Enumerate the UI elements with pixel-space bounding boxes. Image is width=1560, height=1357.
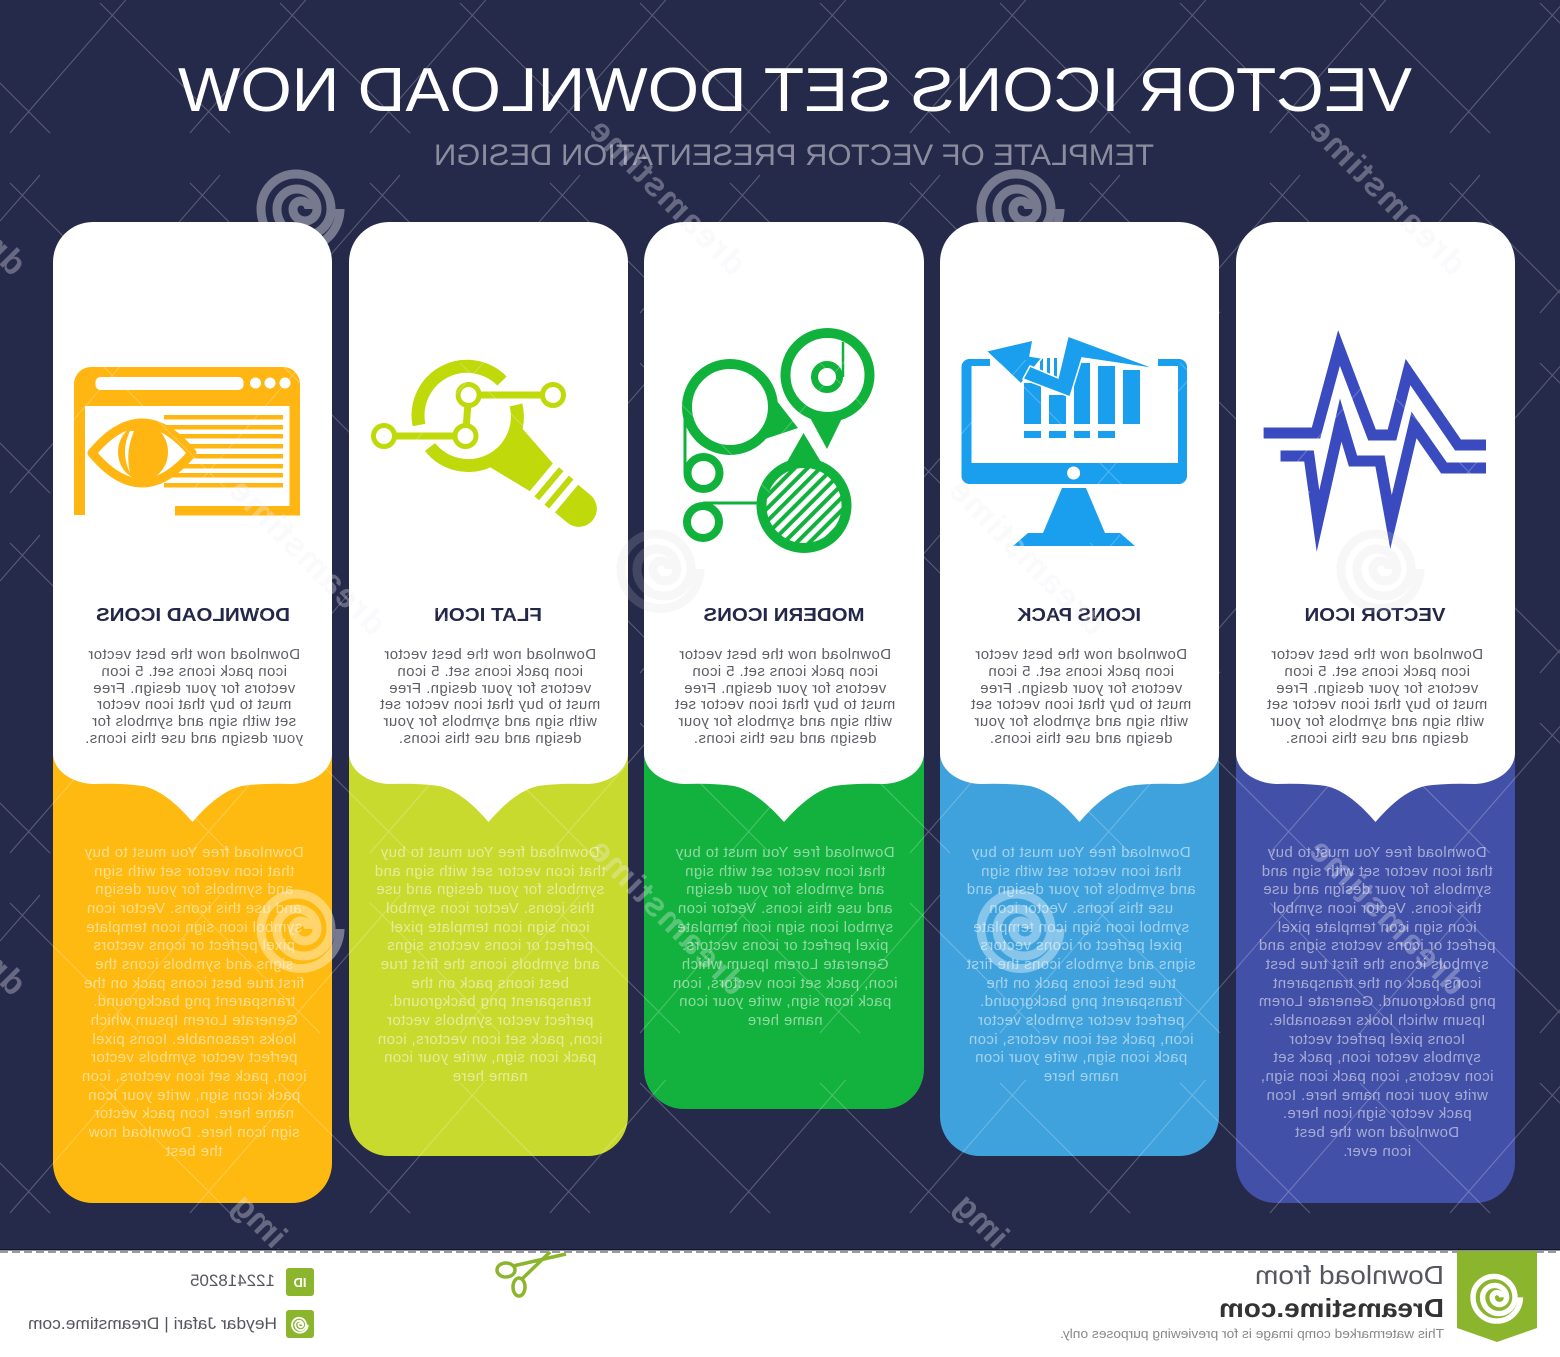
- text: upper description: Download now the best vector: [88, 646, 300, 663]
- text: lower description: icon ever.: [1343, 1143, 1411, 1160]
- text: lower description: Generate Lorem Ipsum which: [90, 1012, 298, 1029]
- text: lower description: icon sign icon template pixel: [390, 919, 590, 936]
- heading: modern icons: MODERN ICONS: [704, 604, 864, 625]
- text: upper description: [674, 646, 895, 747]
- panel: flat icon: [349, 222, 628, 1156]
- text: lower description: signs and symbols icons the first: [966, 956, 1196, 973]
- text: lower description: write your icon name here. Icon: [1266, 1087, 1489, 1104]
- text: lower description: icon, pack set icon vectors, icon: [82, 1068, 306, 1085]
- text: lower description: and symbols for your design and: [966, 881, 1196, 898]
- text: upper description: design and use this icons.: [989, 730, 1173, 747]
- text: upper description: vectors for your design. Free: [389, 680, 591, 697]
- watermark spirals: [261, 174, 1420, 1330]
- text: lower description: [1258, 844, 1496, 1160]
- text: lower description: Download free You must to buy: [971, 844, 1191, 861]
- panel: icons pack: [940, 222, 1219, 1156]
- text: lower description: icon vectors, icon pack icon sign,: [1261, 1068, 1493, 1085]
- text: lower description: Generate Lorem Ipsum which: [681, 956, 889, 973]
- text: lower description: this icons. Vector icon symbol: [1273, 900, 1481, 917]
- heading: vector icon: VECTOR ICON: [1304, 604, 1446, 625]
- text: lower description: icon, pack set icon vectors, icon: [378, 1031, 602, 1048]
- text: upper description: design and use this icons.: [1285, 730, 1469, 747]
- text: lower description: [673, 844, 897, 1029]
- text: lower description: and use this icons. Vector icon: [677, 900, 893, 917]
- text: upper description: must to buy that icon vector set: [1266, 696, 1487, 713]
- text: lower description: name here. Icon pack vector: [94, 1105, 294, 1122]
- text: upper description: [970, 646, 1191, 747]
- text: lower description: symbol icon sign icon template: [973, 919, 1189, 936]
- text: upper description: your design and use this icons.: [85, 730, 303, 747]
- watermark text: .img: [947, 1186, 1023, 1262]
- text: lower description: icons pack on the transparent: [1272, 975, 1481, 992]
- text: upper description: [1266, 646, 1487, 747]
- text: lower description: Download free You must to buy: [84, 844, 304, 861]
- text: dreamstime.com: Dreamstime.com: [1219, 1293, 1444, 1323]
- text: watermark note: This watermarked comp image is for previewing purposes only.: [1060, 1326, 1444, 1341]
- heading: download icons: DOWNLOAD ICONS: [96, 604, 290, 625]
- watermark text: dreamstime: [942, 471, 1114, 643]
- text: lower description: [966, 844, 1196, 1085]
- text: lower description: that icon vector set with sign and: [1261, 863, 1493, 880]
- text: lower description: pack icon sign, write your icon: [384, 1049, 596, 1066]
- text: upper description: must to buy that icon vector: [97, 696, 291, 713]
- text: upper description: with sign and symbols for your: [383, 713, 598, 730]
- text: upper description: [379, 646, 600, 747]
- footer: [0, 1249, 1560, 1357]
- watermark text: dreamstime: [1302, 831, 1474, 1003]
- text: upper description: icon pack icons set. 5 icon: [397, 663, 583, 680]
- text: lower description: pack icon sign, write your icon: [975, 1049, 1187, 1066]
- text: lower description: perfect vector symbols vector: [978, 1012, 1184, 1029]
- text: upper description: Download now the best vector: [679, 646, 891, 663]
- text: lower description: perfect vector symbols vector: [387, 1012, 593, 1029]
- text: lower description: and symbols for your design: [95, 881, 293, 898]
- text: lower description: icon, pack set icon vectors, icon: [673, 975, 897, 992]
- icon: browser with eye: [74, 367, 300, 516]
- watermark text: dreamstime: [582, 111, 754, 283]
- text: upper description: design and use this icons.: [693, 730, 877, 747]
- watermark spirals on white: [621, 534, 1420, 608]
- text: lower description: transparent png background.: [389, 993, 591, 1010]
- text: lower description: name here: [452, 1068, 528, 1085]
- text: lower description: pixel perfect or icons vectors.: [682, 937, 888, 954]
- text: lower description: pack icon sign, write your icon: [88, 1087, 300, 1104]
- text: upper description: vectors for your design. Free: [980, 680, 1182, 697]
- panel: modern icons: [644, 222, 924, 1109]
- text: lower description: pack icon sign, write your icon: [679, 993, 891, 1010]
- text: lower description: symbols vector icon, pack set: [1273, 1049, 1481, 1066]
- text: lower description: perfect or icons vectors signs: [387, 937, 593, 954]
- text: lower description: png background. Generate Lorem: [1258, 993, 1496, 1010]
- text: download from: Download from: [1255, 1260, 1444, 1290]
- text: lower description: Download free You must to buy: [380, 844, 600, 861]
- text: lower description: Download free You must to buy: [675, 844, 895, 861]
- text: lower description: best icons pack on the: [411, 975, 569, 992]
- text: upper description: must to buy that icon vector set: [379, 696, 600, 713]
- text: lower description: perfect or icons vectors signs and: [1258, 937, 1496, 954]
- icon: monitor with bar chart: [961, 336, 1187, 546]
- text: lower description: the best: [165, 1143, 222, 1160]
- text: lower description: symbols icons the first true best: [1265, 956, 1489, 973]
- text: lower description: true best icons pack on the: [986, 975, 1176, 992]
- text: lower description: Ipsum which looks reasonable.: [1269, 1012, 1485, 1029]
- text: lower description: first true best icons pack on the: [84, 975, 304, 992]
- text: lower description: transparent png background.: [980, 993, 1182, 1010]
- badge: id: ID: [294, 1275, 306, 1290]
- text: upper description: set with sign and symbols for: [92, 713, 296, 730]
- badge: author: [286, 1310, 314, 1338]
- heading: flat icon: FLAT ICON: [434, 604, 542, 625]
- text: lower description: looks reasonable. Icons pixel: [92, 1031, 296, 1048]
- text: lower description: that icon vector set with sign: [94, 863, 294, 880]
- text: upper description: Download now the best vector: [1271, 646, 1483, 663]
- text: upper description: vectors for your design. Free: [93, 680, 295, 697]
- text: upper description: icon pack icons set. 5 icon: [988, 663, 1174, 680]
- text: upper description: with sign and symbols for your: [974, 713, 1189, 730]
- panel: download icons: [53, 222, 332, 1203]
- text: lower description: that icon vector set with sign: [981, 863, 1181, 880]
- heading: icons pack: ICONS PACK: [1016, 604, 1141, 625]
- text: upper description: Download now the best vector: [975, 646, 1187, 663]
- text: lower description: and symbols for your design: [686, 881, 884, 898]
- text: lower description: pixel perfect or icons vectors: [93, 937, 295, 954]
- text: lower description: that icon vector set with sign and: [374, 863, 606, 880]
- text: image id: 122418205: [190, 1271, 275, 1290]
- text: lower description: [374, 844, 606, 1085]
- icon: magnifier with nodes: [374, 366, 609, 540]
- icon: dreamstime ribbon: [1457, 1251, 1537, 1342]
- text: lower description: Download now the best: [1294, 1124, 1459, 1141]
- subtitle: TEMPLATE OF VECTOR PRESENTATION DESIGN: [434, 139, 1154, 172]
- text: upper description: icon pack icons set. 5 icon: [692, 663, 878, 680]
- text: upper description: must to buy that icon vector set: [674, 696, 895, 713]
- icon: waveform: [1264, 348, 1486, 522]
- title: VECTOR ICONS SET DOWNLOAD NOW: [178, 56, 1412, 125]
- watermark text: dreamstime: [1302, 111, 1474, 283]
- icon: map pins and circles: [685, 333, 870, 548]
- text: lower description: and use this icons. Vector icon: [86, 900, 302, 917]
- text: upper description: with sign and symbols for your: [678, 713, 893, 730]
- text: lower description: name here: [1043, 1068, 1119, 1085]
- text: lower description: pixel perfect or icons vectors: [980, 937, 1182, 954]
- badge: id: [286, 1268, 314, 1296]
- text: upper description: vectors for your design. Free: [684, 680, 886, 697]
- text: lower description: symbols for your design and use: [376, 881, 604, 898]
- text: lower description: symbols for your design and use: [1263, 881, 1491, 898]
- text: upper description: [85, 646, 303, 747]
- text: upper description: vectors for your design. Free: [1276, 680, 1478, 697]
- text: lower description: Icons pixel perfect vector: [1289, 1031, 1465, 1048]
- text: lower description: signs and symbols icons the: [95, 956, 293, 973]
- text: lower description: symbol icon sign icon template: [677, 919, 893, 936]
- text: lower description: that icon vector set with sign: [685, 863, 885, 880]
- text: lower description: use this icons. Vector icon: [989, 900, 1173, 917]
- panel: vector icon: [1236, 222, 1515, 1203]
- text: author: Heydar Jafari | Dreamstime.com: [28, 1314, 277, 1333]
- text: upper description: Download now the best vector: [384, 646, 596, 663]
- text: lower description: transparent png background.: [93, 993, 295, 1010]
- text: upper description: icon pack icons set. 5 icon: [101, 663, 287, 680]
- text: lower description: sign icon here. Download now: [88, 1124, 300, 1141]
- text: upper description: design and use this icons.: [398, 730, 582, 747]
- watermark text: .img: [225, 1186, 301, 1262]
- text: upper description: must to buy that icon vector set: [970, 696, 1191, 713]
- text: lower description: Download free You must to buy: [1267, 844, 1487, 861]
- text: lower description: and symbols icons the first true: [380, 956, 600, 973]
- text: lower description: [82, 844, 306, 1160]
- text: lower description: perfect vector symbols vector: [91, 1049, 297, 1066]
- watermark text: dreamstime: [582, 831, 754, 1003]
- text: lower description: icon, pack set icon vectors, icon: [969, 1031, 1193, 1048]
- watermark text: dreamstime: [222, 471, 394, 643]
- text: lower description: pack vector sign icon here.: [1282, 1105, 1472, 1122]
- text: lower description: icon sign icon template pixel: [1277, 919, 1477, 936]
- text: lower description: this icons. Vector icon symbol: [386, 900, 594, 917]
- text: lower description: name here: [747, 1012, 823, 1029]
- icon: scissors: [497, 1252, 566, 1296]
- text: lower description: symbol icon sign icon template: [86, 919, 302, 936]
- text: upper description: icon pack icons set. 5 icon: [1284, 663, 1470, 680]
- text: upper description: with sign and symbols for your: [1270, 713, 1485, 730]
